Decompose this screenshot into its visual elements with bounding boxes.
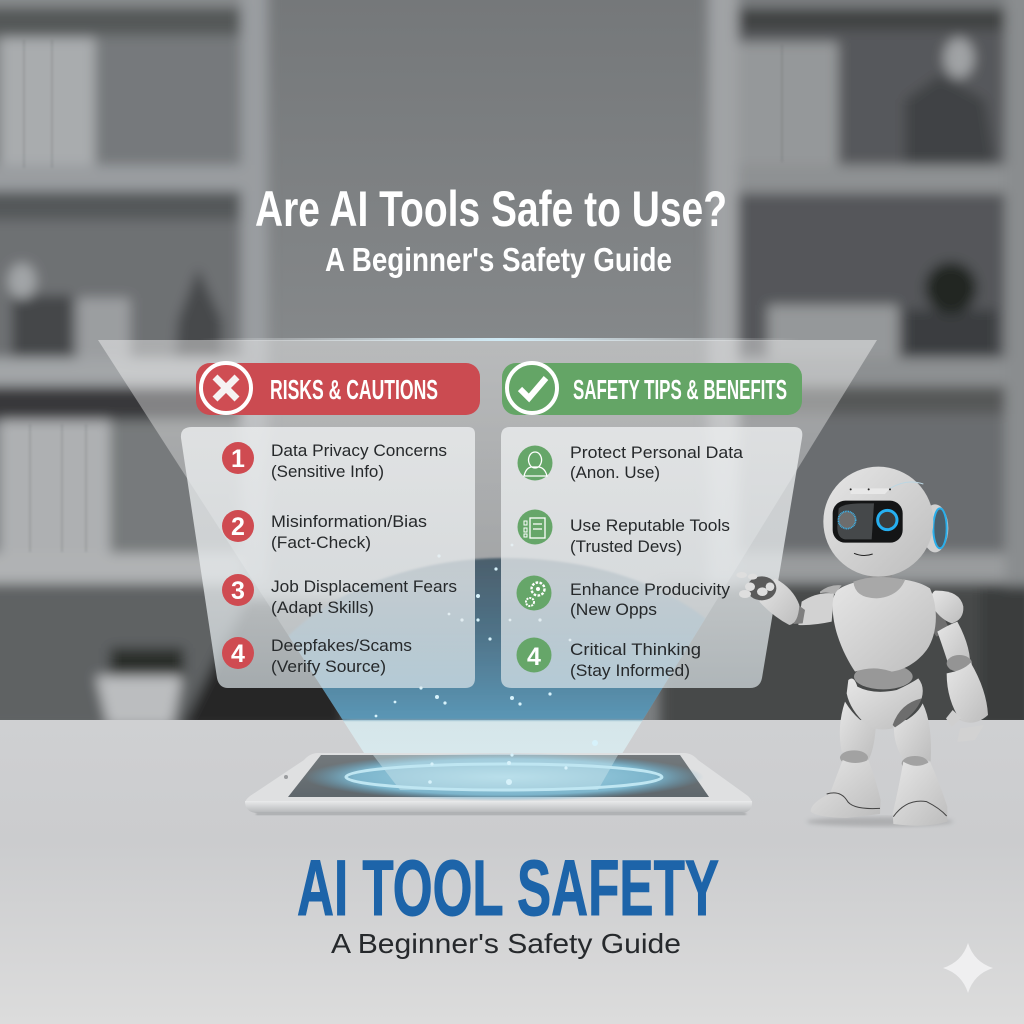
robot torso: [833, 572, 936, 672]
robot pelvis: [847, 664, 923, 729]
tip 2: (Trusted Devs): [570, 537, 682, 556]
risk 4: (Verify Source): [271, 657, 386, 676]
risk 1: Data Privacy Concerns: [271, 441, 447, 460]
risk 1: 1: [231, 445, 245, 473]
risk 3: [222, 574, 457, 617]
risk 2: (Fact-Check): [271, 533, 371, 552]
risk 3: 3: [231, 577, 245, 605]
tip 3: [516, 576, 731, 619]
risk 3: (Adapt Skills): [271, 598, 374, 617]
risks list card: [181, 427, 475, 688]
risk 2: Misinformation/Bias: [271, 512, 427, 531]
tip 4: 4: [527, 643, 541, 671]
panel: risks and cautions: [181, 363, 480, 688]
holographic projection beam: [98, 338, 877, 770]
risk 4: 4: [231, 640, 245, 668]
robot legs: [811, 702, 947, 826]
header: risks: [196, 363, 480, 415]
header: safety tips: [502, 363, 802, 415]
risk 2: [222, 510, 427, 552]
risk 1: [222, 441, 447, 481]
main label: AI Tool Safety: AI TOOL SAFETY: [297, 843, 719, 932]
tips list card: [501, 427, 802, 688]
robot near arm: [924, 591, 988, 742]
risk 1: (Sensitive Info): [271, 462, 384, 481]
sub label: A Beginner's Safety Guide: [331, 928, 681, 959]
tip 1: Protect Personal Data: [570, 443, 744, 462]
tablet: [245, 753, 752, 815]
robot head: [823, 467, 948, 577]
tip 4: (Stay Informed): [570, 661, 690, 680]
subtitle: A Beginner's Safety Guide: [325, 241, 672, 278]
tip 3: (New Opps: [570, 600, 657, 619]
tip 3: Enhance Producivity: [570, 580, 731, 599]
icon: sparkle star: [943, 943, 993, 993]
risk 2: 2: [231, 513, 245, 541]
tip 4: Critical Thinking: [570, 640, 701, 659]
robot far arm: [736, 572, 842, 625]
sparkle particles: [375, 544, 598, 785]
title: [255, 181, 727, 278]
tip 2: Use Reputable Tools: [570, 516, 730, 535]
title: Are AI Tools Safe to Use?: [255, 181, 727, 237]
robot: [736, 467, 988, 826]
risk 4: [222, 636, 412, 676]
desk surface: [0, 720, 1024, 1024]
tip 2: [518, 510, 730, 556]
tip 1: (Anon. Use): [570, 463, 660, 482]
risk 3: Job Displacement Fears: [271, 577, 457, 596]
header: risks: RISKS & CAUTIONS: [270, 374, 438, 405]
tip 4: [516, 638, 701, 680]
background: blurred office bookshelves: [0, 0, 1024, 734]
header: safety tips: SAFETY TIPS & BENEFITS: [573, 374, 787, 405]
panel: safety tips and benefits: [501, 363, 802, 688]
risk 4: Deepfakes/Scams: [271, 636, 412, 655]
tip 1: [518, 443, 744, 482]
